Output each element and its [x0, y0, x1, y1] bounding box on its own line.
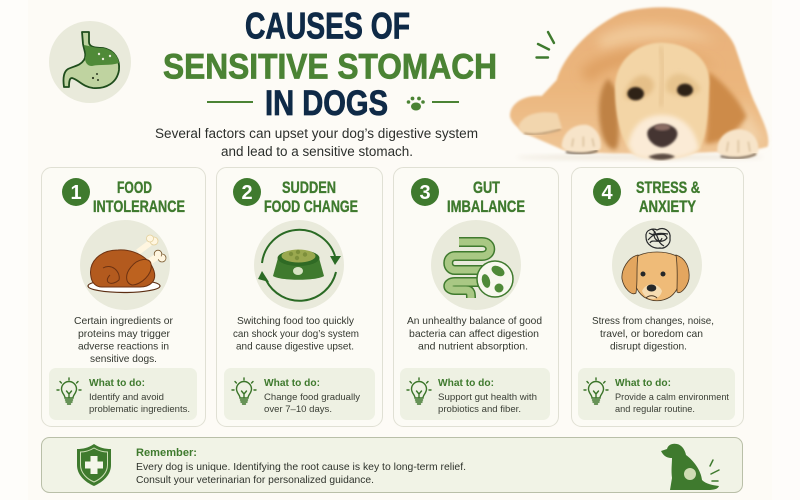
- what to do 1: problematic ingredients.: [89, 404, 190, 415]
- heading 3: IMBALANCE: [447, 198, 525, 216]
- number badge 1: [62, 178, 90, 206]
- heading 2: FOOD CHANGE: [264, 198, 358, 216]
- title: IN DOGS: [265, 84, 388, 123]
- description 1: [74, 316, 174, 365]
- description 1: adverse reactions in: [78, 342, 169, 352]
- heading 2: [264, 179, 358, 216]
- description 3: An unhealthy balance of good: [407, 316, 542, 327]
- description 2: and cause digestive upset.: [236, 342, 354, 352]
- heading 1: INTOLERANCE: [93, 198, 185, 216]
- what to do 2: [224, 368, 375, 420]
- description 2: Switching food too quickly: [237, 316, 355, 327]
- title: CAUSES OF: [245, 6, 410, 46]
- remember text: Consult your veterinarian for personalized guidance.: [136, 474, 374, 486]
- callout: remember: [42, 438, 742, 492]
- subtitle: Several factors can upset your dog’s digestive system: [155, 126, 478, 141]
- what to do 4: and regular routine.: [615, 404, 695, 415]
- number badge 2: 2: [241, 182, 253, 204]
- description 3: bacteria can affect digestion: [409, 329, 539, 340]
- description 2: [233, 316, 359, 352]
- what to do 3: Support gut health with: [438, 392, 537, 403]
- panel: sudden food change: [216, 168, 382, 426]
- what to do 2: over 7–10 days.: [264, 404, 332, 415]
- heading 4: [636, 179, 700, 216]
- icon: anxious puppy: [612, 220, 702, 310]
- number badge 1: 1: [70, 182, 82, 204]
- title: [163, 6, 497, 123]
- what to do 1: Identify and avoid: [89, 392, 164, 403]
- what to do 3: probiotics and fiber.: [438, 404, 521, 415]
- remember text: [136, 447, 466, 486]
- number badge 3: [411, 178, 439, 206]
- icon: food bowl with arrows: [254, 220, 344, 310]
- icon: paw: [407, 97, 425, 110]
- what to do 3: What to do:: [438, 378, 494, 389]
- what to do 2: Change food gradually: [264, 392, 360, 403]
- remember text: Remember:: [136, 447, 197, 459]
- what to do 4: Provide a calm environment: [615, 392, 729, 403]
- heading 2: SUDDEN: [282, 179, 336, 197]
- description 1: sensitive dogs.: [90, 354, 157, 365]
- number badge 4: [593, 178, 621, 206]
- icon: shield with cross: [77, 444, 111, 486]
- description 2: can shock your dog’s system: [233, 329, 359, 340]
- panel: stress and anxiety: [572, 168, 744, 426]
- what to do 2: What to do:: [264, 378, 320, 389]
- heading 4: ANXIETY: [639, 198, 696, 216]
- description 4: disrupt digestion.: [610, 342, 687, 352]
- icon: dog silhouette: [661, 444, 719, 490]
- (front paws): [562, 125, 758, 158]
- what to do 1: [49, 368, 197, 420]
- description 3: and nutrient absorption.: [418, 342, 528, 352]
- description 1: proteins may trigger: [78, 329, 171, 340]
- heading 1: [93, 179, 185, 216]
- subtitle: [155, 126, 478, 159]
- description 4: [592, 316, 714, 352]
- description 1: Certain ingredients or: [74, 316, 174, 327]
- number badge 2: [233, 178, 261, 206]
- heading 3: [447, 179, 525, 216]
- icon: stomach: [49, 21, 131, 103]
- description 3: [407, 316, 542, 352]
- (nose and mouth): [647, 124, 677, 160]
- icon: intestine and bacteria: [431, 220, 521, 310]
- icon: roast turkey: [80, 220, 170, 310]
- title: SENSITIVE STOMACH: [163, 48, 497, 86]
- heading 4: STRESS &: [636, 179, 700, 197]
- description 4: travel, or boredom can: [600, 329, 703, 340]
- what to do 4: [578, 368, 735, 420]
- (eyes): [627, 84, 693, 100]
- description 4: Stress from changes, noise,: [592, 316, 714, 327]
- dog illustration: [510, 7, 768, 160]
- what to do 4: What to do:: [615, 378, 671, 389]
- heading 3: GUT: [473, 179, 500, 197]
- what to do 1: What to do:: [89, 378, 145, 389]
- subtitle: and lead to a sensitive stomach.: [221, 144, 413, 159]
- number badge 3: 3: [419, 182, 431, 204]
- remember text: Every dog is unique. Identifying the root cause is key to long-term relief.: [136, 461, 466, 473]
- icon: worry marks: [536, 32, 554, 58]
- panel: food intolerance: [42, 168, 206, 426]
- number badge 4: 4: [601, 182, 613, 204]
- heading 1: FOOD: [117, 179, 152, 197]
- what to do 3: [400, 368, 550, 420]
- panel: gut imbalance: [394, 168, 558, 426]
